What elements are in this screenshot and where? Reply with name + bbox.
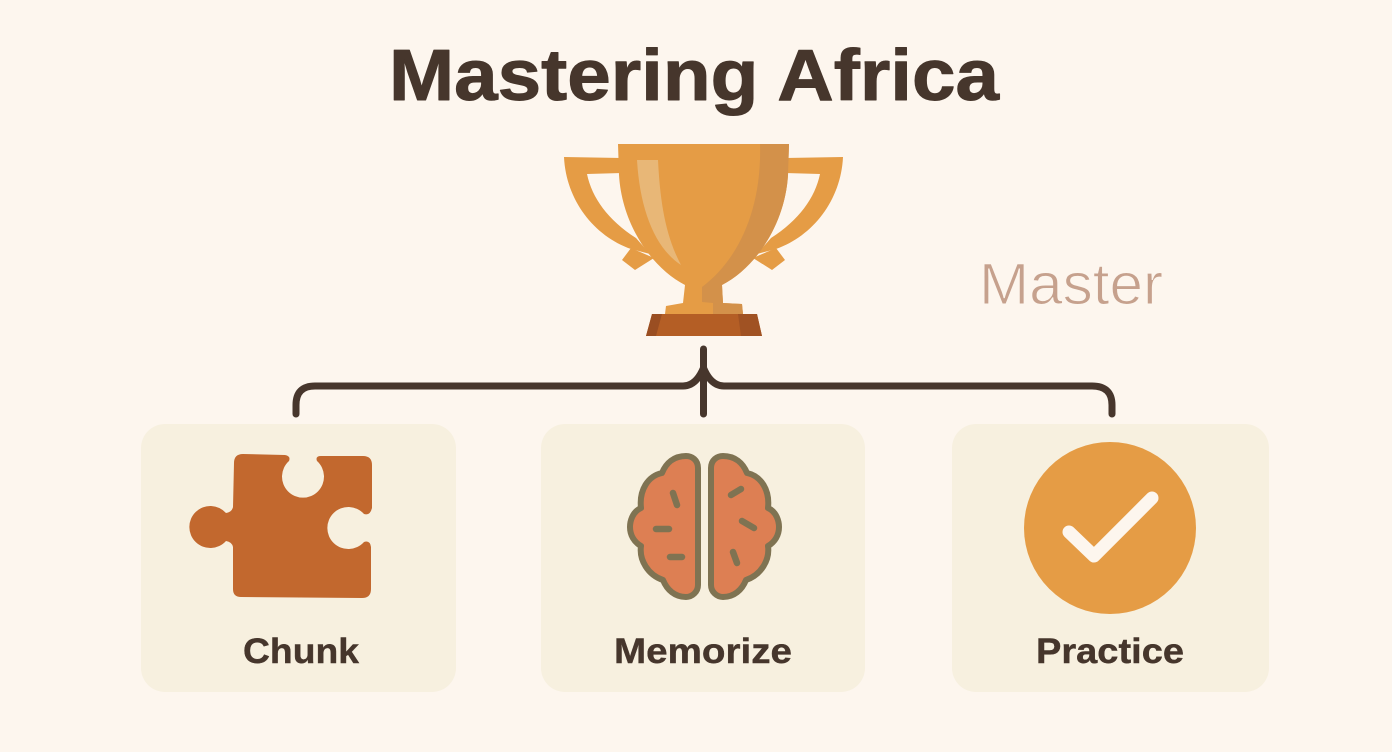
title: Mastering Africa [389,36,1000,116]
label: master: Master [979,252,1163,317]
icon: puzzle piece [189,454,372,598]
check circle disc [1024,442,1196,614]
brain folds [656,489,754,563]
panel: memorize [541,424,865,692]
trophy plinth [646,314,762,336]
trophy cup [618,144,789,314]
practice card [952,424,1269,692]
icon: check circle [1024,442,1196,614]
panel: chunk [141,424,456,692]
trophy right tab [753,248,785,270]
memorize card [541,424,865,692]
check mark [1069,498,1152,556]
icon: trophy [564,144,843,336]
label: chunk: Chunk [243,632,360,671]
trophy cup shade [702,144,789,314]
trophy cup highlight [637,160,681,265]
chunk card [141,424,456,692]
brain right hemisphere [711,456,779,597]
trophy left tab [622,248,654,270]
brain left hemisphere [630,456,698,597]
panel: practice [952,424,1269,692]
bracket connector [296,349,1112,414]
trophy plinth left shade [646,314,662,336]
label: memorize: Memorize [614,632,792,671]
icon: brain [630,456,779,597]
trophy left handle [564,157,650,254]
trophy plinth right shade [738,314,762,336]
label: practice: Practice [1036,632,1184,671]
trophy right handle [757,157,843,254]
